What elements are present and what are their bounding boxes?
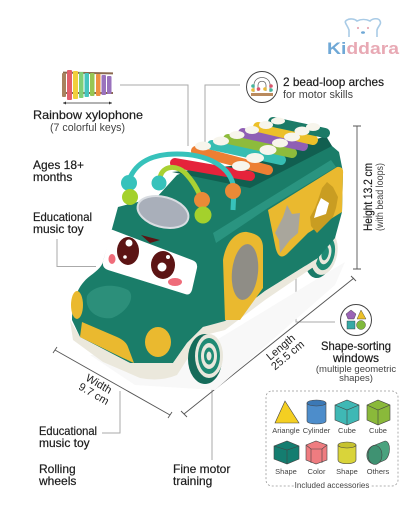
label: Fine motor training: training [173, 474, 212, 488]
dimension: height [353, 126, 386, 269]
front wheel [188, 334, 223, 384]
accessory: pink prism: Color [308, 467, 326, 476]
xylophone on roof [175, 118, 325, 176]
dimension label: height: Height 13.2 cm [361, 163, 375, 231]
heading: windows: windows [332, 351, 379, 365]
grille [80, 322, 134, 363]
lens dome [134, 191, 192, 233]
dimension label: width: Width [83, 372, 114, 397]
left headlight [71, 291, 83, 319]
heading: 2 bead-loop arches: 2 bead-loop arches [283, 75, 384, 89]
door window [229, 243, 261, 301]
roof shadow under keys [172, 136, 332, 188]
label: Ages 18+ months: months [33, 170, 72, 184]
dimension: width [53, 347, 172, 418]
dimension value: length: 25.5 cm [269, 339, 307, 373]
bead arches [121, 154, 241, 224]
shadow [90, 262, 345, 390]
label: Fine motor training: Fine motor [173, 462, 230, 476]
heading: Rainbow xylophone: Rainbow xylophone [33, 108, 143, 122]
cheeks [168, 278, 182, 286]
icon: shapes [340, 304, 372, 336]
body and hood [72, 140, 343, 363]
label: Educational music toy lower: Educational [39, 424, 97, 438]
accessory: green cylinder: Others [367, 467, 389, 476]
dimension value: width: 9.7 cm [76, 381, 111, 408]
rear wheel [301, 228, 341, 281]
label: Educational music toy: Educational [33, 210, 92, 224]
label: Rolling wheels: Rolling [39, 462, 76, 476]
heading: Shape-sorting windows: Shape-sorting [321, 339, 391, 353]
right eye [151, 251, 175, 279]
side skirt and bumper [70, 258, 318, 379]
logo: Kiddara [327, 19, 400, 58]
roof ridge [213, 160, 336, 243]
sub text: for motor skills: for motor skills [283, 89, 353, 101]
accessory: green cube: Cube [369, 426, 387, 435]
panel: included accessories [266, 391, 398, 492]
caption background [294, 480, 370, 492]
product: toy bus [70, 118, 345, 390]
dimension label: length: Length [264, 332, 298, 363]
yellow panel: window [268, 167, 343, 257]
right headlight [145, 327, 171, 357]
xylophone pegs [195, 118, 320, 171]
label: music toy lower: music toy [39, 436, 90, 450]
logo wordmark: Kiddara [327, 39, 400, 58]
star window [275, 205, 300, 253]
sub text: multiple geometric shapes: (multiple geometric [316, 364, 396, 375]
flower window [310, 182, 338, 233]
caption: included accessories: Included accessories [295, 481, 369, 490]
left eye [117, 237, 139, 265]
accessory: cylinder: Cylinder [303, 426, 331, 435]
accessory: teal cube: Cube [338, 426, 356, 435]
windshield face [103, 230, 197, 294]
dimension note: bead loops: (with bead loops) [375, 163, 386, 231]
label: Rolling wheels: wheels [38, 474, 76, 488]
accessory: triangle: Ariangle [272, 426, 300, 435]
icon: xylophone [62, 70, 113, 104]
hood highlight [87, 286, 131, 318]
eyebrow [141, 235, 160, 243]
accessory: dark cube: Shape [275, 467, 297, 476]
accessory: yellow cylinder: Shape [336, 467, 358, 476]
label: music toy: music toy [33, 222, 84, 236]
window opening [314, 198, 329, 218]
leader lines [57, 85, 335, 460]
sub text: multiple geometric shapes: shapes) [339, 373, 373, 384]
sub text: 7 colorful keys: (7 colorful keys) [50, 122, 125, 134]
dimension: length [181, 276, 356, 417]
icon: bear head [345, 19, 381, 37]
yellow panel: door [223, 232, 263, 320]
label: Ages 18+ months: Ages 18+ [33, 158, 84, 172]
icon: bead-loop arches [246, 72, 278, 102]
